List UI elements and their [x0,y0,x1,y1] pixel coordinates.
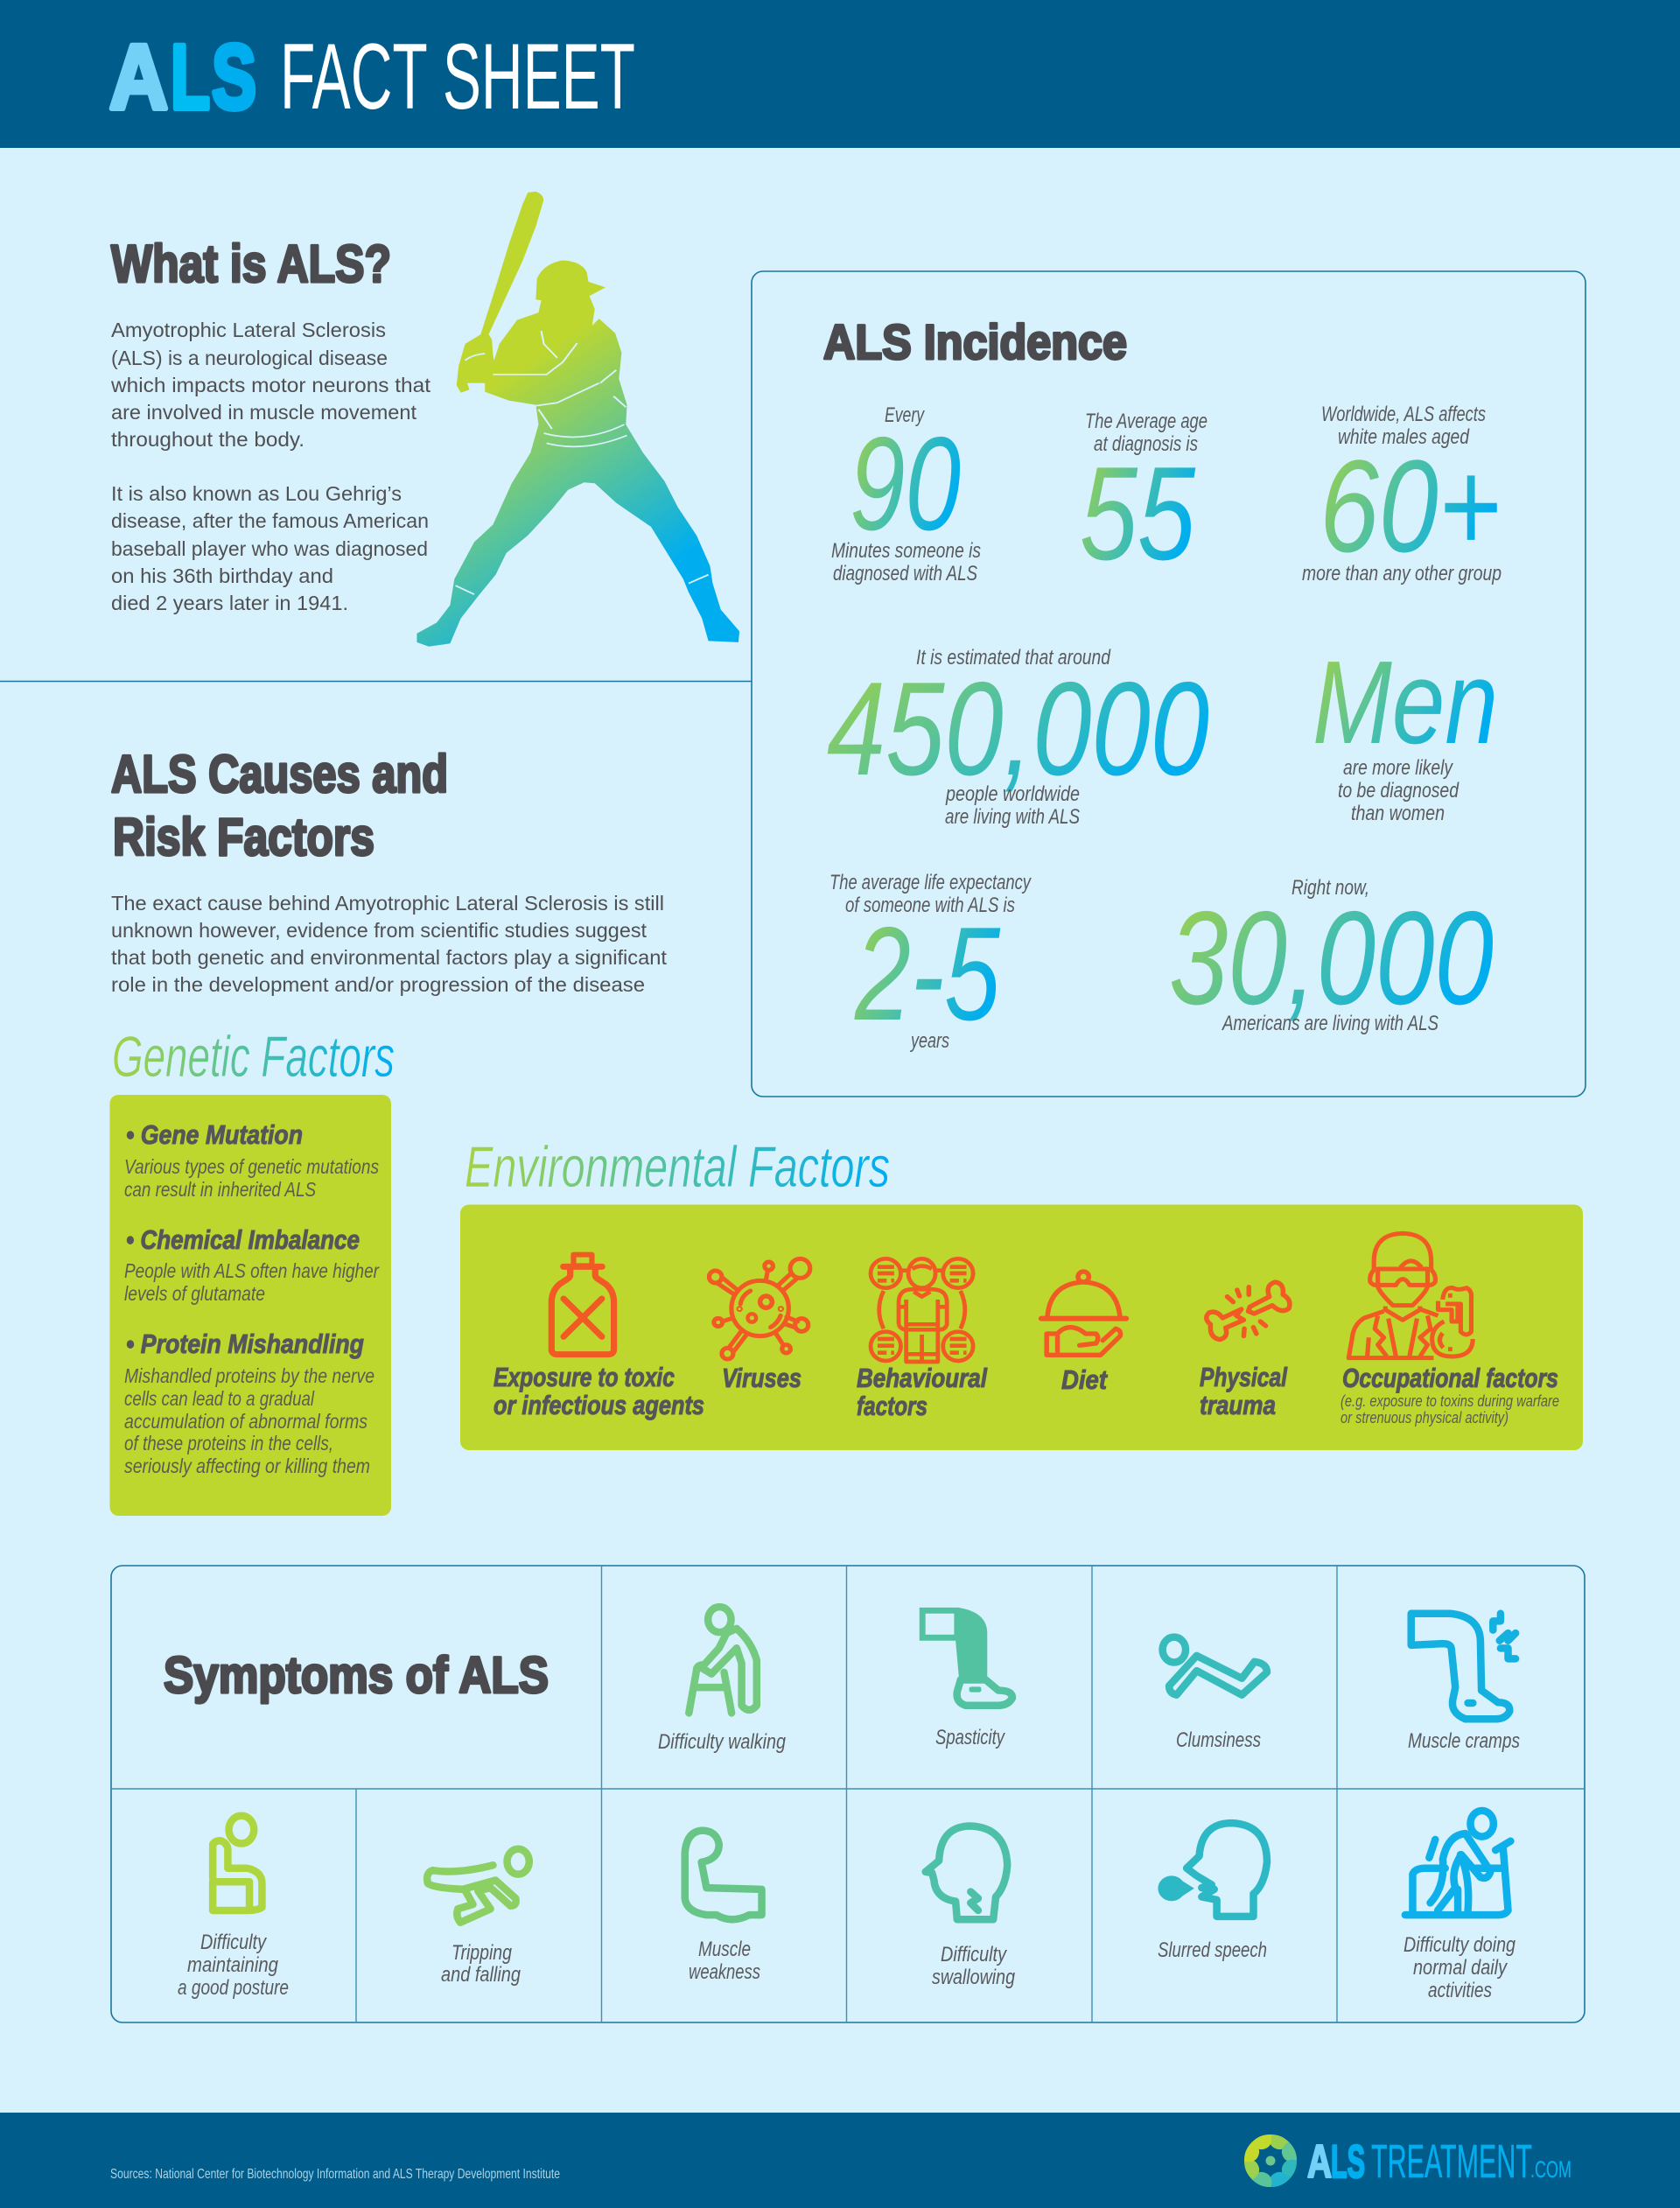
symptom: difficulty swallowing: swallowing [932,1966,1016,1989]
label: toxic agents [494,1362,704,1420]
icon: toxic bottle [551,1255,614,1355]
panel: genetic factors [110,1095,391,1516]
symptom: tripping and falling: and falling [441,1963,522,1987]
factor: chemical imbalance [124,1224,380,1305]
factor: gene mutation: can result in inherited ALS [124,1178,317,1201]
stat: 2-5: of someone with ALS is [845,894,1015,917]
symptom: difficulty maintaining posture [178,1816,289,2000]
title: A [109,26,168,129]
stat: 60+: Worldwide, ALS affects [1321,403,1486,426]
text block: causes: that both genetic and environmental factors play a significant [111,946,667,969]
stat: Men: than women [1351,802,1445,825]
symptom: difficulty doing daily activities: activities [1428,1979,1492,2002]
text block: what is ALS: which impacts motor neurons that [110,374,430,396]
text block: what is ALS: throughout the body. [111,428,304,451]
symptom: muscle weakness [685,1831,762,1984]
stat: 60+: 60+ [1320,432,1501,579]
text block: causes [111,892,667,996]
label: toxic agents: or infectious agents [494,1390,704,1420]
stat: 90: 90 [850,410,961,558]
symptom: difficulty walking [658,1607,787,1754]
label: occupational factors: or strenuous physical activity) [1340,1409,1508,1426]
baseball player silhouette [416,192,739,647]
text block: what is ALS: are involved in muscle movement [111,401,416,424]
symptom: slurred speech: Slurred speech [1158,1938,1267,1962]
logo wordmark: A [1307,2136,1332,2188]
sources note: Sources: National Center for Biotechnology Information and ALS Therapy Development Institute [110,2167,560,2182]
symptom: difficulty doing daily activities: Difficulty doing [1404,1933,1516,1957]
text block: what is ALS: Amyotrophic Lateral Sclerosis [111,319,386,341]
symptom: spasticity: Spasticity [935,1726,1006,1749]
heading: Environmental Factors: Environmental Factors [465,1134,890,1199]
stat: 30,000: Right now, [1292,876,1369,900]
label: behavioural factors [857,1363,988,1421]
symptom: difficulty maintaining posture: maintaining [187,1953,279,1977]
label: toxic agents: Exposure to toxic [494,1362,675,1392]
stat: 2-5: years [910,1029,949,1053]
factor: protein mishandling: seriously affecting or killing them [124,1454,370,1477]
factor: gene mutation: • Gene Mutation [126,1119,303,1150]
factor: protein mishandling: Mishandled proteins by the nerve [124,1364,374,1387]
symptom: muscle cramps [1408,1614,1520,1753]
label: behavioural factors: factors [857,1391,928,1421]
title: S [212,26,256,129]
label: physical trauma: Physical [1200,1362,1288,1392]
stat: 90: Every [885,403,925,427]
label: occupational factors: Occupational factors [1342,1363,1558,1393]
text block: causes: role in the development and/or progression of the disease [111,973,645,996]
factor: chemical imbalance: • Chemical Imbalance [126,1224,360,1255]
text block: causes: The exact cause behind Amyotrophic Lateral Sclerosis is still [111,892,664,915]
factor: protein mishandling: accumulation of abnormal forms [124,1410,368,1433]
icon: behavioural factors [871,1258,973,1362]
stat: 90: Minutes someone is [831,539,981,563]
header banner [0,0,1680,148]
factor: protein mishandling: of these proteins in the cells, [124,1432,333,1454]
icon: worker with goggles [1348,1233,1473,1358]
text block: what is ALS [110,319,430,614]
label: behavioural factors: Behavioural [857,1363,988,1393]
logo wordmark: .COM [1530,2156,1572,2183]
stat: 2-5 [830,871,1032,1053]
heading: Genetic Factors: Genetic Factors [112,1024,395,1089]
text block: what is ALS: disease, after the famous American [111,509,429,532]
symptom: difficulty doing daily activities: normal daily [1413,1956,1508,1980]
symptom: difficulty swallowing: Difficulty [941,1943,1008,1966]
icon: virus [709,1258,810,1359]
stat: 90 [831,403,981,585]
stat: 30,000: Americans are living with ALS [1221,1012,1438,1035]
logo wordmark [1307,2135,1572,2188]
symptom: muscle weakness: weakness [689,1960,760,1984]
symptom: muscle cramps: Muscle cramps [1408,1729,1520,1753]
stat: 55: The Average age [1085,410,1208,433]
factor: chemical imbalance: People with ALS often have higher [124,1259,380,1282]
symptom: clumsiness [1163,1637,1267,1752]
logo wordmark: TREATMENT [1371,2135,1532,2188]
title: L [171,26,210,129]
symptom: difficulty doing daily activities [1404,1811,1516,2002]
stat: 30,000: 30,000 [1169,884,1494,1033]
stat: Men [1312,636,1498,825]
stat: Men: are more likely [1343,756,1454,780]
heading: What is ALS: What is ALS? [111,235,391,293]
heading: ALS Causes and Risk Factors: Risk Factors [113,808,374,866]
panel: environmental factors [460,1204,1583,1450]
logo icon [1242,2132,1299,2190]
symptom: clumsiness: Clumsiness [1176,1728,1261,1752]
label: physical trauma [1200,1362,1288,1420]
stat: 450,000: 450,000 [827,655,1209,803]
factor: protein mishandling: • Protein Mishandling [126,1328,364,1359]
stat: 90: diagnosed with ALS [833,562,977,585]
stat: 60+ [1302,403,1502,585]
factor: gene mutation [124,1119,379,1201]
stat: 2-5: The average life expectancy [830,871,1032,894]
panel: symptoms grid [111,1566,1585,2022]
text block: what is ALS: on his 36th birthday and [111,564,333,587]
title: FACT SHEET [280,24,635,129]
stat: 55: at diagnosis is [1094,432,1198,456]
symptom: spasticity [920,1608,1012,1749]
factor: protein mishandling: cells can lead to a gradual [124,1387,315,1410]
symptom: difficulty walking: Difficulty walking [658,1730,787,1754]
stat: Men: Men [1312,636,1498,768]
stat: 60+: white males aged [1338,425,1470,449]
icon: diet cloche and hand [1041,1272,1126,1355]
symptom: difficulty maintaining posture: Difficulty [200,1931,268,1954]
text block: causes: unknown however, evidence from scientific studies suggest [111,919,647,942]
divider line [0,681,752,683]
symptom: tripping and falling [427,1849,529,1987]
label: physical trauma: trauma [1200,1390,1276,1420]
stat: 60+: more than any other group [1302,562,1502,585]
label: occupational factors [1340,1363,1559,1426]
stat: 2-5: 2-5 [854,900,1000,1048]
stat: 450,000 [827,646,1209,829]
label: viruses: Viruses [722,1363,802,1393]
text block: what is ALS: baseball player who was diagnosed [111,537,428,560]
stat: 450,000: people worldwide [945,782,1080,806]
heading: ALS Incidence: ALS Incidence [823,314,1127,369]
stat: 450,000: are living with ALS [945,805,1080,829]
footer banner [0,2113,1680,2208]
text block: what is ALS: It is also known as Lou Gehrig’s [111,482,402,505]
icon: broken bone [1207,1282,1290,1340]
title [109,24,635,129]
stat: Men: to be diagnosed [1338,779,1460,803]
stat: 450,000: It is estimated that around [916,646,1111,669]
heading: ALS Causes and Risk Factors: ALS Causes and [111,745,448,803]
factor: gene mutation: Various types of genetic mutations [124,1155,379,1178]
label: occupational factors: (e.g. exposure to toxins during warfare [1340,1392,1559,1410]
symptom: difficulty swallowing [926,1826,1016,1989]
text block: what is ALS: died 2 years later in 1941. [111,592,348,614]
factor: protein mishandling [124,1328,374,1477]
text block: what is ALS: (ALS) is a neurological disease [111,347,388,369]
symptom: tripping and falling: Tripping [452,1941,513,1965]
label: diet: Diet [1061,1364,1108,1395]
symptom: muscle weakness: Muscle [698,1938,751,1961]
symptom: difficulty maintaining posture: a good posture [178,1976,289,2000]
factor: chemical imbalance: levels of glutamate [124,1282,265,1305]
logo wordmark: LS [1331,2136,1365,2188]
heading: Symptoms of ALS: Symptoms of ALS [164,1647,549,1704]
panel: ALS incidence [752,271,1586,1097]
symptom: slurred speech [1158,1823,1267,1962]
heading: ALS Causes and Risk Factors [111,745,448,866]
stat: 55: 55 [1080,439,1195,588]
